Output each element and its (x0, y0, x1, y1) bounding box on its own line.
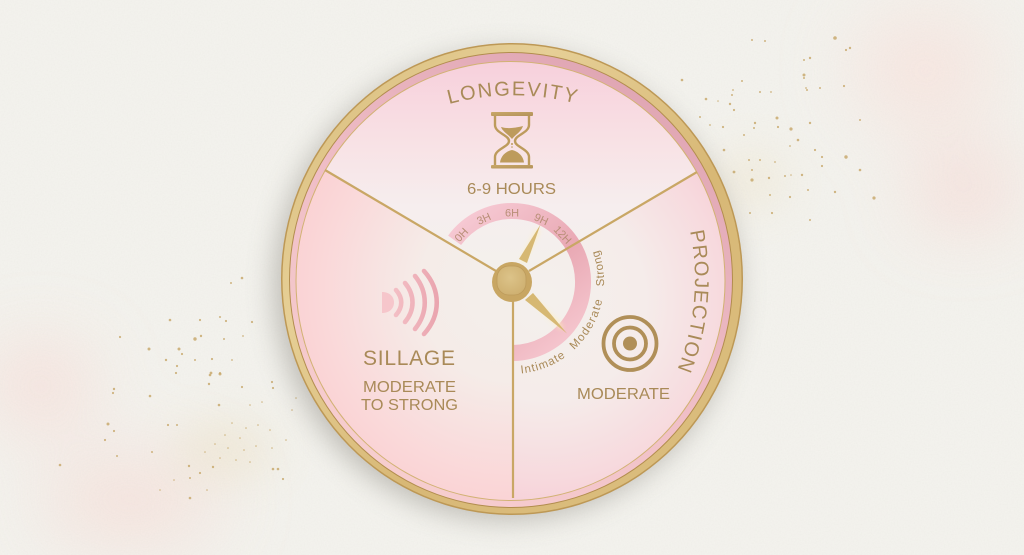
sillage value: MODERATE (363, 379, 456, 396)
icon: hourglass (491, 112, 533, 168)
divider spokes (325, 170, 697, 498)
longevity value: 6-9 HOURS (467, 181, 556, 198)
projection value: MODERATE (577, 386, 670, 403)
intensity scale labels: Moderate (569, 300, 602, 350)
sector: projection (512, 174, 724, 500)
centre hub (492, 262, 532, 302)
ring hour labels: 12H (551, 224, 573, 247)
intensity scale labels (521, 250, 604, 374)
icon: target (604, 317, 656, 370)
ring hour labels (453, 208, 573, 247)
background: pink watercolor wash, lower left (0, 349, 220, 540)
dial face sectors (296, 62, 724, 500)
heading: projection: PROJECTION (678, 230, 709, 373)
clock bezel (281, 43, 743, 515)
ring hour labels: 9H (532, 212, 550, 228)
heading: sillage: SILLAGE (363, 347, 455, 370)
clock hand: to moderate (525, 293, 567, 334)
ring hour labels: 0H (453, 226, 471, 245)
gold dust: lower left (59, 277, 297, 499)
heading: longevity: LONGEVITY (447, 82, 578, 104)
progress ring (455, 211, 583, 353)
background: faint dust clouds (175, 152, 785, 480)
sector: longevity (326, 62, 696, 271)
sector: sillage (296, 172, 512, 500)
clock hand: up to nine hours (519, 224, 540, 263)
ring hour labels: 3H (475, 211, 493, 228)
background: pink watercolor wash, upper right (855, 15, 1015, 224)
intensity scale labels: Intimate (521, 353, 564, 374)
icon: sound waves (382, 271, 437, 334)
intensity scale labels: Strong (593, 250, 604, 286)
sillage value: TO STRONG (361, 397, 458, 414)
clock hands glow (522, 230, 562, 328)
clock drop shadow (274, 52, 738, 520)
gold dust: upper right (681, 36, 876, 221)
sillage value (361, 379, 458, 414)
ring hour labels: 6H (505, 208, 519, 220)
